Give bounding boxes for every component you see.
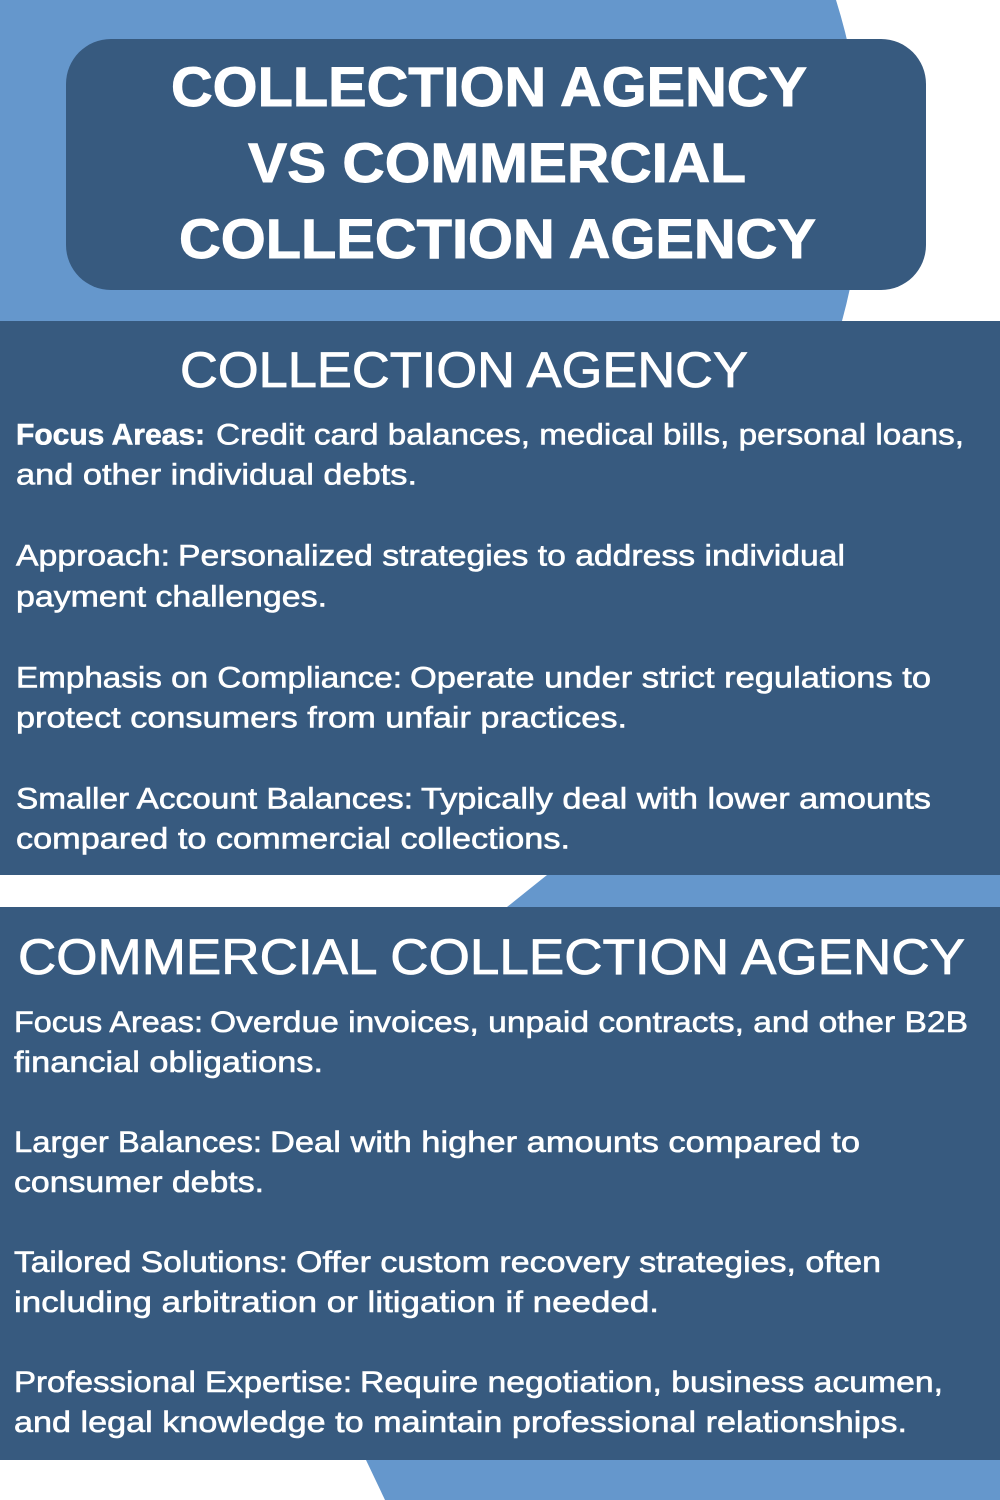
text block: larger balances (14, 1126, 860, 1199)
text block: focus areas: Credit card balances, medical bills, personal loans, (216, 418, 964, 452)
background accent: top light blue shape (0, 0, 863, 321)
text block: focus areas: and other individual debts. (16, 458, 417, 492)
text block: approach: Approach: (16, 540, 170, 572)
text block: approach: Personalized strategies to address individual (178, 540, 845, 572)
text block: tailored solutions: Offer custom recovery strategies, often (296, 1246, 881, 1279)
text block: smaller account balances: Typically deal with lower amounts (421, 782, 931, 816)
text block: smaller account balances: compared to commercial collections. (16, 822, 570, 856)
text block: focus areas: Overdue invoices, unpaid contracts, and other B2B (210, 1006, 968, 1039)
text block: larger balances: consumer debts. (14, 1166, 264, 1199)
heading: commercial collection agency: COMMERCIAL COLLECTION AGENCY (18, 929, 965, 985)
panel: collection agency (0, 321, 1000, 875)
text block: emphasis on compliance: Emphasis on Compliance: (16, 662, 402, 694)
text block: tailored solutions: Tailored Solutions: (14, 1246, 288, 1279)
text block: emphasis on compliance: Operate under strict regulations to (410, 662, 931, 694)
text block: emphasis on compliance: protect consumers from unfair practices. (16, 702, 627, 734)
background accent: middle light blue band (507, 875, 1000, 907)
text block: tailored solutions: including arbitration or litigation if needed. (14, 1286, 659, 1319)
text block: approach: payment challenges. (16, 580, 327, 614)
panel: commercial collection agency (0, 907, 1000, 1460)
text block: professional expertise: and legal knowledge to maintain professional relationships. (14, 1406, 907, 1439)
text block: larger balances: Deal with higher amounts compared to (270, 1126, 860, 1159)
text block: focus areas: Focus Areas: (14, 1006, 203, 1039)
title banner (66, 39, 926, 290)
text block: focus areas (14, 1006, 968, 1079)
text block: focus areas: financial obligations. (14, 1046, 323, 1079)
text block: focus areas: Focus Areas: (16, 418, 205, 452)
title: COLLECTION AGENCY (171, 55, 807, 118)
text block: focus areas (16, 418, 964, 492)
text block: approach (16, 540, 845, 614)
text block: smaller account balances (16, 782, 931, 856)
title: VS COMMERCIAL (248, 131, 746, 194)
text block: professional expertise: Require negotiation, business acumen, (360, 1366, 943, 1399)
text block: tailored solutions (14, 1246, 881, 1319)
text block: emphasis on compliance (16, 662, 931, 734)
text block: professional expertise (14, 1366, 943, 1439)
text block: professional expertise: Professional Expertise: (14, 1366, 352, 1399)
heading: collection agency: COLLECTION AGENCY (180, 342, 748, 398)
title: COLLECTION AGENCY (179, 207, 816, 270)
text block: larger balances: Larger Balances: (14, 1126, 262, 1159)
title (171, 55, 816, 270)
background accent: bottom light blue shape (366, 1460, 1000, 1500)
text block: smaller account balances: Smaller Account Balances: (16, 782, 413, 816)
